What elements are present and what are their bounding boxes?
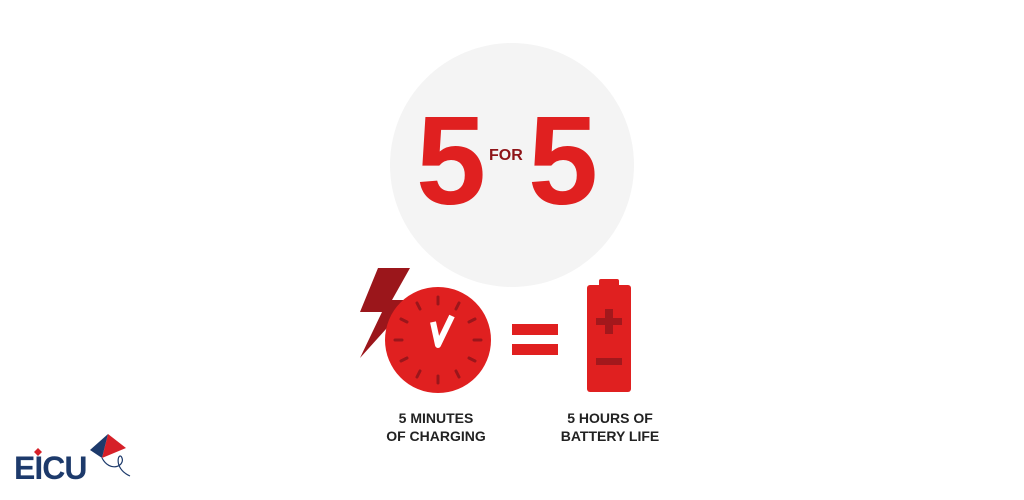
word FOR: FOR [489,147,523,164]
background circle [390,43,634,287]
logo: EICU: EICU [14,450,86,486]
lightning bolt [360,268,412,358]
icon: lightning clock [360,268,491,393]
text: 5 minutes of charging [386,410,486,444]
logo: EICU [14,434,130,486]
clock face [385,287,491,393]
text: 5 minutes of charging: OF CHARGING [386,428,486,444]
text: 5 hours of battery life: 5 HOURS OF [567,410,653,426]
equals sign [512,324,558,355]
text: 5 hours of battery life [561,410,659,444]
text: 5 minutes of charging: 5 MINUTES [399,410,473,426]
text: 5 hours of battery life: BATTERY LIFE [561,428,659,444]
big five right: 5 [528,90,598,231]
icon: battery [587,279,631,392]
big five left: 5 [416,90,486,231]
title: 5 for 5 [416,90,598,231]
